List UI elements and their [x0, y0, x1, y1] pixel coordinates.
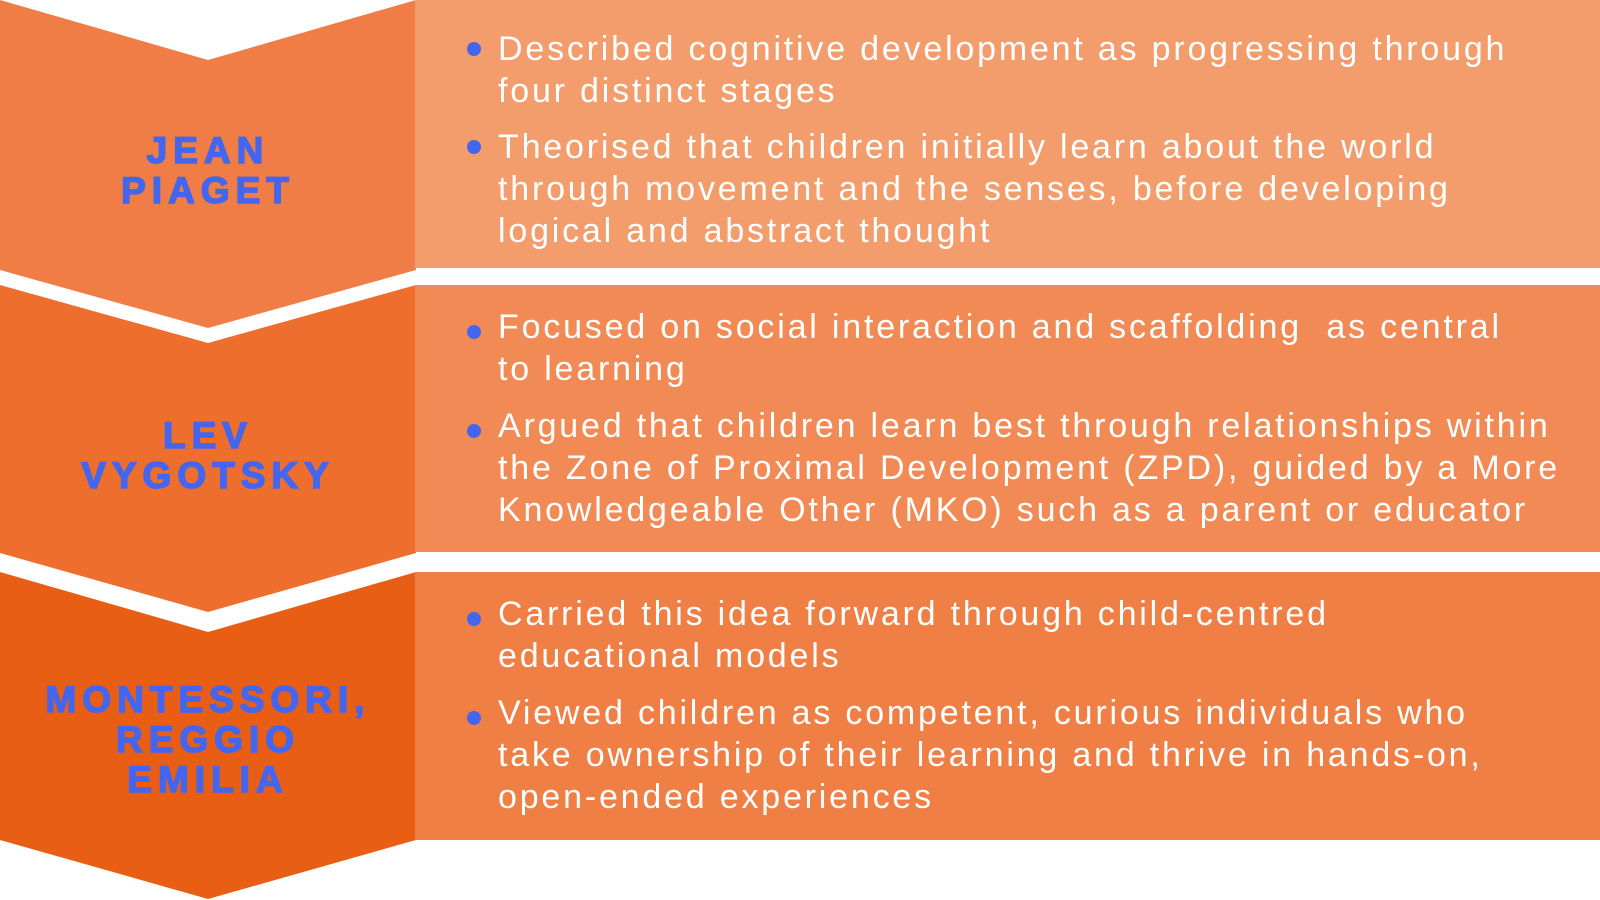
name: Jean Piaget: JEAN — [147, 130, 269, 171]
name: Lev Vygotsky: LEV — [163, 415, 253, 456]
name: Montessori, Reggio Emilia: MONTESSORI, — [45, 679, 371, 720]
chevron: Montessori — [0, 572, 416, 899]
text: Vygotsky 2: Argued that children learn best through relationships within — [498, 407, 1551, 445]
name: Montessori, Reggio Emilia: EMILIA — [127, 759, 289, 800]
text: Vygotsky 1 — [498, 308, 1502, 388]
name: Jean Piaget — [121, 130, 295, 211]
chevron: Vygotsky — [0, 285, 416, 612]
name: Lev Vygotsky — [80, 415, 335, 496]
bullet: Montessori 1 — [467, 612, 481, 626]
name: Montessori, Reggio Emilia — [45, 679, 371, 800]
panel: Piaget — [415, 0, 1600, 268]
text: Piaget 1: Described cognitive development as progressing through — [498, 30, 1507, 68]
text: Montessori 2: take ownership of their learning and thrive in hands-on, — [498, 736, 1483, 774]
bullet: Vygotsky 2 — [467, 424, 481, 438]
text: Vygotsky 1: Focused on social interaction and scaffolding as central — [498, 308, 1502, 346]
bullet: Montessori 2 — [467, 711, 481, 725]
text: Vygotsky 2: the Zone of Proximal Development (ZPD), guided by a More — [498, 449, 1560, 487]
text: Montessori 1 — [498, 595, 1329, 675]
bullet: Piaget 2 — [467, 140, 481, 154]
panel: Montessori — [415, 572, 1600, 840]
name: Lev Vygotsky: VYGOTSKY — [81, 455, 335, 496]
text: Piaget 1 — [498, 30, 1507, 110]
text: Montessori 2: Viewed children as competent, curious individuals who — [498, 694, 1468, 732]
bullet: Piaget 1 — [467, 42, 481, 56]
panel: Vygotsky — [415, 285, 1600, 552]
name: Montessori, Reggio Emilia: REGGIO — [116, 719, 300, 760]
text: Piaget 1: four distinct stages — [498, 72, 837, 110]
text: Vygotsky 1: to learning — [498, 350, 688, 388]
text: Vygotsky 2 — [498, 407, 1560, 529]
text: Montessori 1: Carried this idea forward through child-centred — [498, 595, 1329, 633]
text: Piaget 2: logical and abstract thought — [498, 212, 992, 250]
name: Jean Piaget: PIAGET — [121, 170, 295, 211]
chevron: Piaget — [0, 0, 416, 328]
text: Piaget 2 — [498, 128, 1451, 250]
text: Montessori 2: open-ended experiences — [498, 778, 934, 816]
text: Piaget 2: through movement and the senses, before developing — [498, 170, 1451, 208]
bullet: Vygotsky 1 — [467, 325, 481, 339]
text: Piaget 2: Theorised that children initially learn about the world — [498, 128, 1436, 166]
text: Montessori 2 — [498, 694, 1483, 816]
text: Montessori 1: educational models — [498, 637, 841, 675]
text: Vygotsky 2: Knowledgeable Other (MKO) such as a parent or educator — [498, 491, 1528, 529]
